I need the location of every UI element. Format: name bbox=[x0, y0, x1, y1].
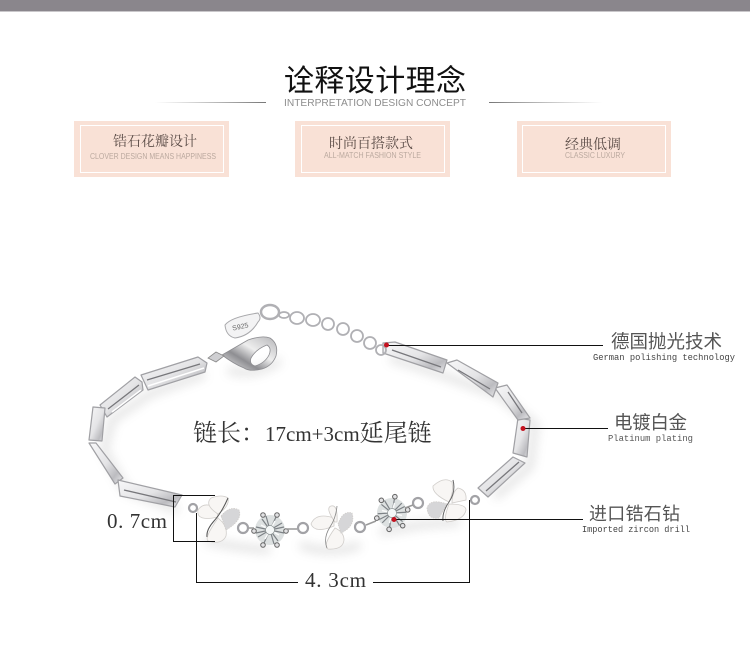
diamonds bbox=[252, 513, 288, 547]
bracelet illustration bbox=[89, 305, 535, 550]
panel: all-match fashion: 时尚百搭款式 bbox=[329, 135, 413, 152]
callout: imported zircon: 进口锆石钻 bbox=[589, 504, 680, 524]
callout: platinum plating: 电镀白金 bbox=[614, 412, 687, 433]
right links bbox=[383, 342, 530, 497]
panel: classic luxury bbox=[517, 121, 671, 177]
panel: all-match fashion bbox=[295, 121, 450, 177]
panel: zircon petal design: CLOVER DESIGN MEANS HAPPINESS bbox=[90, 152, 216, 161]
panel: classic luxury: CLASSIC LUXURY bbox=[565, 151, 626, 160]
title: 诠释设计理念 bbox=[284, 65, 466, 98]
callout: platinum plating: Platinum plating bbox=[608, 434, 693, 444]
lobster clasp bbox=[208, 337, 277, 370]
extension chain bbox=[261, 305, 386, 355]
callout: imported zircon bbox=[392, 504, 690, 535]
clover left bbox=[198, 496, 240, 542]
connector rings bbox=[189, 496, 479, 533]
top bar bbox=[0, 0, 750, 12]
clover right bbox=[427, 480, 466, 522]
subtitle: INTERPRETATION DESIGN CONCEPT bbox=[284, 97, 467, 109]
panel: classic luxury: 经典低调 bbox=[565, 137, 621, 153]
dimension: 4.3cm bracket bbox=[196, 500, 470, 592]
callout: German polishing: 德国抛光技术 bbox=[611, 331, 722, 352]
clover charms bbox=[189, 480, 479, 549]
tag bbox=[225, 313, 260, 338]
callout: platinum plating bbox=[520, 412, 693, 444]
dimension text: chain length: 链长：17cm+3cm延尾链 bbox=[193, 420, 432, 447]
callout: German polishing: German polishing technology bbox=[593, 353, 736, 363]
clover middle bbox=[311, 506, 353, 549]
callout: imported zircon: Imported zircon drill bbox=[582, 525, 690, 535]
dimension: 0.7cm bracket: 0. 7cm bbox=[107, 509, 167, 533]
panel: zircon petal design bbox=[74, 121, 229, 177]
callout: German polishing bbox=[384, 331, 736, 363]
tag: S925 bbox=[232, 322, 249, 333]
left links bbox=[89, 357, 207, 507]
dimension: 0.7cm bracket bbox=[107, 496, 215, 542]
panel: all-match fashion: ALL-MATCH FASHION STYLE bbox=[324, 151, 421, 160]
panel: zircon petal design: 锆石花瓣设计 bbox=[113, 133, 197, 150]
dimension: 4.3cm bracket: 4. 3cm bbox=[305, 568, 366, 592]
